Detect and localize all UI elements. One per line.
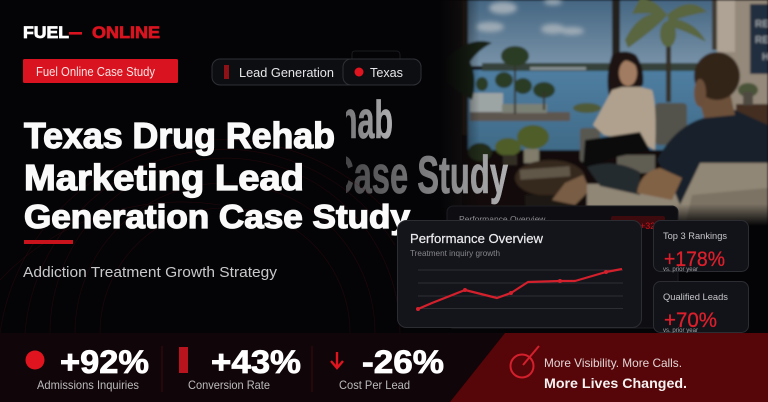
subheading: Treatment inquiry growth [410, 248, 500, 258]
photo fades [440, 0, 480, 226]
card: Qualified Leads [654, 282, 748, 334]
ghost title text: Case Study [330, 146, 508, 205]
title [24, 115, 411, 235]
card: Qualified Leads: +70% [664, 309, 717, 332]
back dashboard panel [447, 206, 678, 328]
back dashboard panel: +32% [640, 221, 663, 231]
subtitle: Addiction Treatment Growth Strategy [23, 264, 278, 281]
stat: cost per lead: -26% [362, 344, 444, 380]
stat: admissions inquiries [26, 344, 149, 392]
stat: conversion rate [179, 344, 301, 392]
logo: ONLINE [92, 24, 160, 42]
callout text: More Lives Changed. [544, 375, 687, 391]
background arcs [0, 140, 400, 333]
left mask covering ghost text [290, 95, 346, 205]
card: Top 3 Rankings: Top 3 Rankings [663, 231, 727, 242]
heading: Performance Overview [410, 231, 544, 246]
card: Top 3 Rankings: +178% [664, 248, 725, 271]
callout text: More Visibility. More Calls. [544, 356, 682, 370]
card: Qualified Leads: vs. prior year [663, 328, 698, 334]
stat: admissions inquiries: +92% [60, 344, 149, 380]
bottom callout panel [450, 333, 768, 402]
pills: Lead Generation and Texas: Texas [370, 65, 403, 80]
panel: performance overview [398, 220, 642, 328]
card: Top 3 Rankings: vs. prior year [663, 267, 698, 273]
line chart [416, 269, 623, 311]
logo [23, 24, 160, 42]
stat: cost per lead [331, 344, 444, 392]
pills: Lead Generation and Texas: Lead Generation [239, 65, 334, 80]
badge: Fuel Online Case Study [23, 59, 178, 83]
ghost title text: Rehab [300, 91, 393, 150]
card: Top 3 Rankings [654, 220, 748, 273]
ghost title text [300, 91, 508, 205]
stat: conversion rate: +43% [211, 344, 301, 380]
stat: cost per lead: Cost Per Lead [339, 378, 410, 392]
back dashboard panel: Performance Overview [459, 214, 546, 224]
stat: conversion rate: Conversion Rate [188, 378, 270, 392]
stat: admissions inquiries: Admissions Inquiries [37, 378, 139, 392]
title: Marketing Lead [24, 157, 304, 198]
title: Generation Case Study [24, 198, 411, 235]
callout text [544, 356, 687, 391]
icon: target with arrow [510, 346, 539, 378]
bottom stats bar [0, 333, 768, 402]
pills: Lead Generation and Texas [212, 51, 421, 85]
title rule [24, 240, 73, 244]
badge: Fuel Online Case Study: Fuel Online Case Study [36, 65, 156, 79]
card: Qualified Leads: Qualified Leads [663, 292, 728, 303]
logo: FUEL [23, 24, 69, 42]
photo: counselor and client in waterfront office [440, 0, 768, 226]
title: Texas Drug Rehab [24, 115, 335, 156]
